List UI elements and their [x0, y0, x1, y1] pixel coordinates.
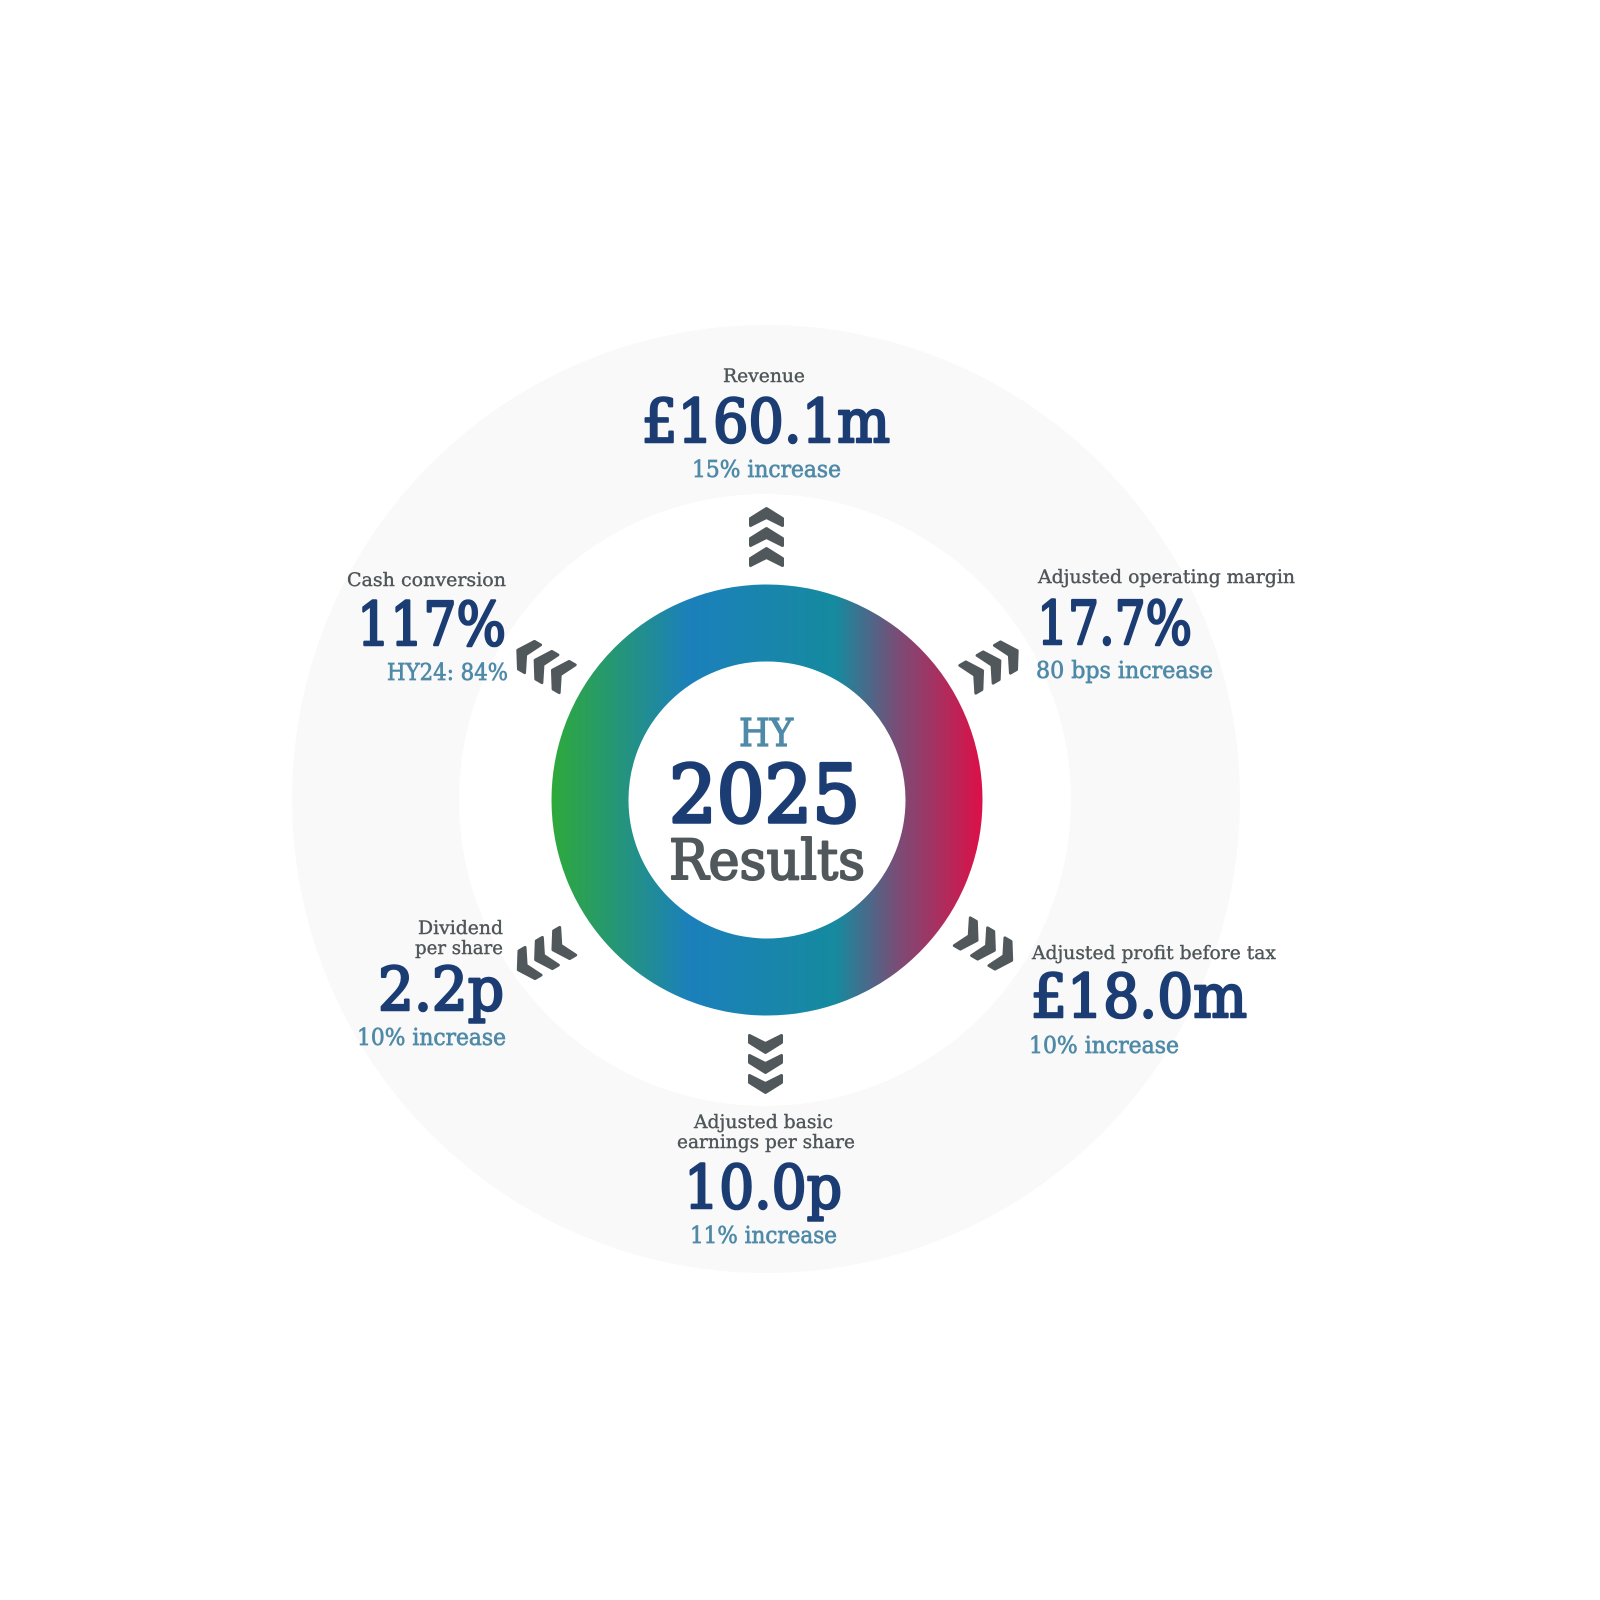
title line: 2025: 2025	[669, 748, 860, 841]
change: adjusted basic earnings per share: 11% increase	[690, 1223, 837, 1249]
value: adjusted operating margin: 17.7%	[1037, 589, 1192, 659]
arrow: upper-right chevrons	[960, 637, 1025, 693]
metric: adjusted profit before tax	[1029, 942, 1276, 1059]
change: adjusted profit before tax: 10% increase	[1029, 1033, 1179, 1059]
change: dividend per share: 10% increase	[357, 1025, 506, 1051]
label: adjusted basic earnings per share: Adjusted basic	[693, 1111, 833, 1133]
metric: adjusted basic earnings per share	[677, 1111, 855, 1249]
label: adjusted basic earnings per share: earnings per share	[677, 1131, 855, 1153]
label: dividend per share: Dividend	[418, 917, 503, 939]
arrow: lower-right chevrons	[954, 918, 1020, 974]
gradient ring	[590, 623, 944, 977]
label: cash conversion: Cash conversion	[347, 569, 506, 591]
arrow: up chevrons	[750, 508, 782, 566]
metric: adjusted operating margin	[1036, 566, 1295, 684]
panel: white middle circle	[459, 494, 1071, 1106]
arrow: upper-left chevrons	[510, 636, 575, 693]
centre title: HY 2025 Results	[669, 711, 865, 892]
value: adjusted profit before tax: £18.0m	[1031, 962, 1247, 1032]
change: adjusted operating margin: 80 bps increase	[1036, 658, 1213, 684]
arrow: lower-left chevrons	[510, 927, 576, 984]
arrow: down chevrons	[750, 1036, 782, 1092]
value: revenue: £160.1m	[642, 387, 890, 457]
change: cash conversion: HY24: 84%	[387, 660, 508, 686]
label: adjusted basic earnings per share	[677, 1111, 855, 1153]
metric: revenue	[642, 365, 890, 483]
title line: HY: HY	[739, 711, 794, 755]
title line: Results: Results	[669, 828, 865, 892]
label: dividend per share: per share	[415, 937, 503, 959]
panel: pale outer disc	[292, 325, 1240, 1273]
value: adjusted basic earnings per share: 10.0p	[684, 1153, 842, 1223]
value: dividend per share: 2.2p	[378, 955, 504, 1025]
label: revenue: Revenue	[723, 365, 805, 387]
metric: cash conversion	[347, 569, 508, 686]
label: dividend per share	[415, 917, 503, 959]
change: revenue: 15% increase	[692, 457, 841, 483]
label: adjusted profit before tax: Adjusted profit before tax	[1031, 942, 1276, 964]
metric: dividend per share	[357, 917, 506, 1051]
value: cash conversion: 117%	[357, 590, 506, 660]
label: adjusted operating margin: Adjusted operating margin	[1037, 566, 1295, 588]
